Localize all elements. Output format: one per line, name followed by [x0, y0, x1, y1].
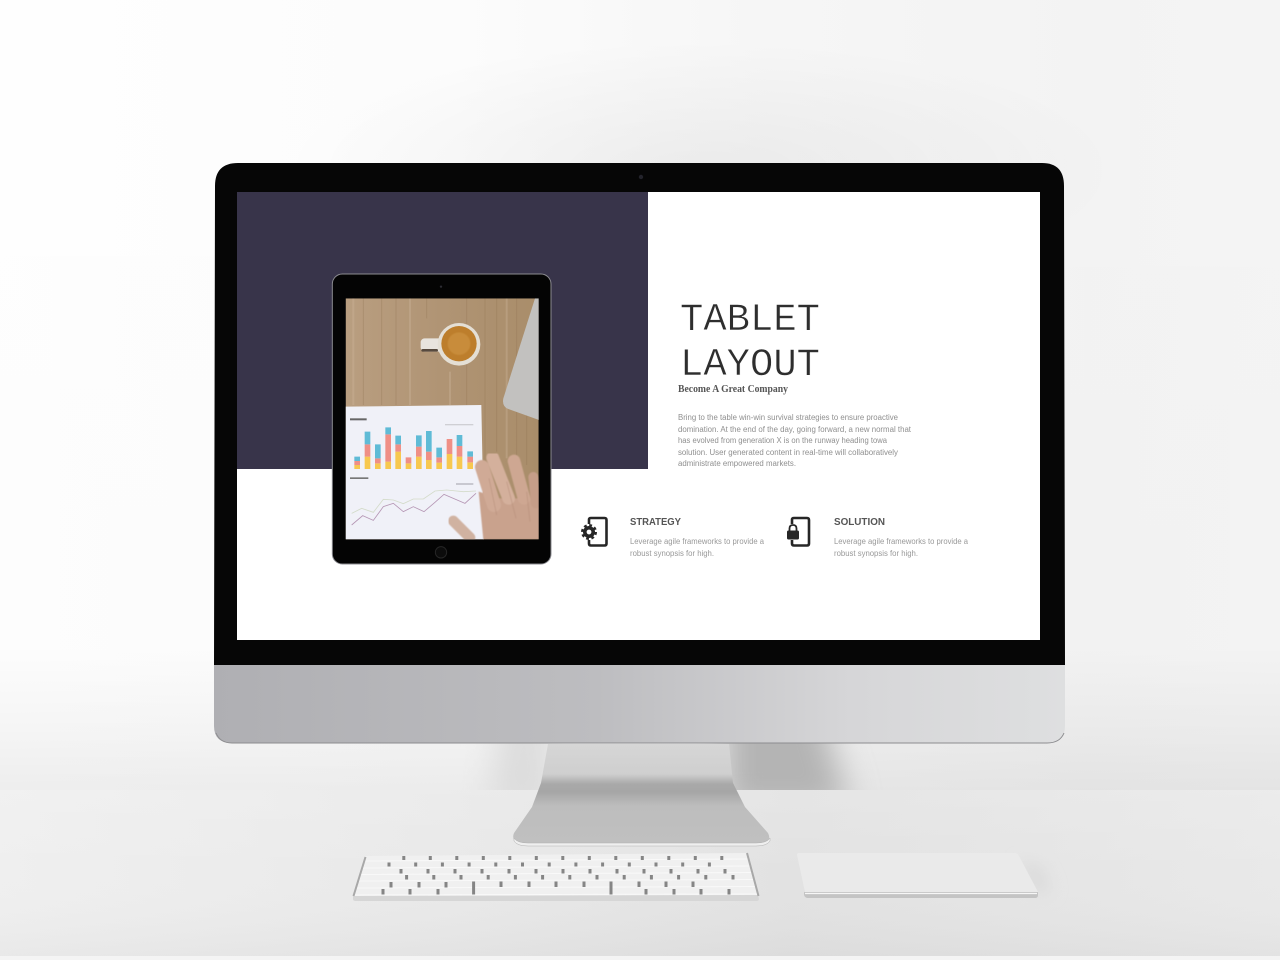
strategy text: robust synopsis for high.	[630, 549, 714, 558]
tablet photo	[346, 298, 540, 539]
line chart	[350, 477, 476, 525]
panel: dark block	[237, 192, 648, 469]
monitor	[214, 163, 1065, 743]
subtitle: Become A Great Company	[678, 384, 789, 395]
report paper	[346, 405, 484, 539]
chin bottom edge	[216, 733, 1064, 743]
bar chart	[350, 418, 473, 469]
title: LAYOUT	[680, 343, 820, 387]
laptop	[503, 298, 540, 420]
keyboard	[353, 853, 759, 901]
body paragraph: administrate empowered markets.	[678, 459, 796, 468]
trackpad	[797, 853, 1052, 898]
body paragraph: Bring to the table win-win survival strategies to ensure proactive	[678, 413, 899, 422]
title	[680, 298, 820, 387]
strategy text: Leverage agile frameworks to provide a	[630, 537, 765, 546]
tablet body	[332, 274, 551, 564]
wood desk	[346, 298, 539, 539]
title: TABLET	[680, 298, 820, 342]
monitor bezel	[214, 163, 1065, 665]
body paragraph: has evolved from generation X is on the runway heading towa	[678, 436, 888, 445]
solution text: Leverage agile frameworks to provide a	[834, 537, 969, 546]
solution text	[834, 537, 969, 558]
solution heading: SOLUTION	[834, 516, 885, 528]
body paragraph: solution. User generated content in real-time will collaboratively	[678, 448, 898, 457]
body paragraph: domination. At the end of the day, going forward, a new normal that	[678, 425, 912, 434]
body paragraph	[678, 413, 912, 468]
solution text: robust synopsis for high.	[834, 549, 918, 558]
tablet mockup	[332, 274, 551, 564]
monitor screen	[237, 192, 1040, 640]
icon: phone with gear	[582, 518, 606, 546]
feature: solution	[787, 516, 969, 558]
feature: strategy	[582, 516, 765, 558]
strategy heading: STRATEGY	[630, 516, 681, 528]
monitor chin	[214, 665, 1065, 743]
tablet camera	[440, 285, 442, 288]
hand	[453, 458, 540, 539]
coffee cup	[421, 323, 480, 366]
monitor stand	[513, 744, 770, 846]
strategy text	[630, 537, 765, 558]
icon: phone with lock	[787, 518, 809, 546]
webcam	[639, 175, 643, 179]
home button	[435, 547, 447, 558]
